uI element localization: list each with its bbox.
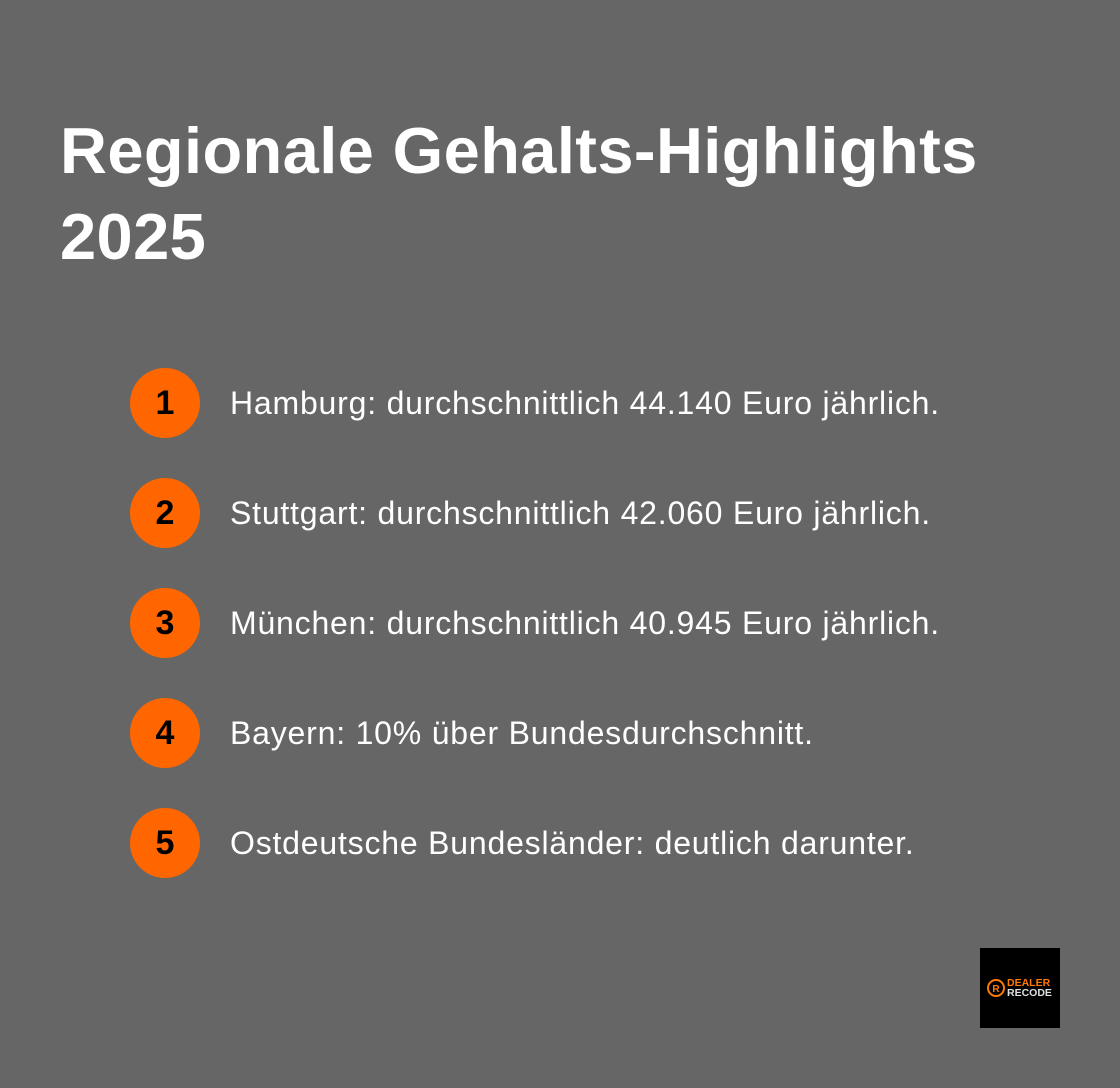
item 2 [130,478,931,548]
item 3 [130,588,940,658]
item 5: Ostdeutsche Bundesländer: deutlich darunter. [230,825,915,861]
item 2: 2 [156,494,174,532]
item 3: München: durchschnittlich 40.945 Euro jährlich. [230,605,940,641]
item 5 [130,808,915,878]
item 1: Hamburg: durchschnittlich 44.140 Euro jährlich. [230,385,940,421]
item 4: Bayern: 10% über Bundesdurchschnitt. [230,715,814,751]
logo: DEALER [1007,977,1051,989]
item 3: 3 [156,604,174,642]
logo: R [992,984,1000,995]
title [60,114,978,273]
title: 2025 [60,200,206,273]
item 1 [130,368,940,438]
item 2: Stuttgart: durchschnittlich 42.060 Euro jährlich. [230,495,931,531]
item 4 [130,698,814,768]
item 1: 1 [156,384,174,422]
logo [980,948,1060,1028]
logo: RECODE [1007,987,1052,999]
item 5: 5 [156,824,174,862]
item 4: 4 [156,714,174,752]
title: Regionale Gehalts-Highlights [60,114,978,187]
